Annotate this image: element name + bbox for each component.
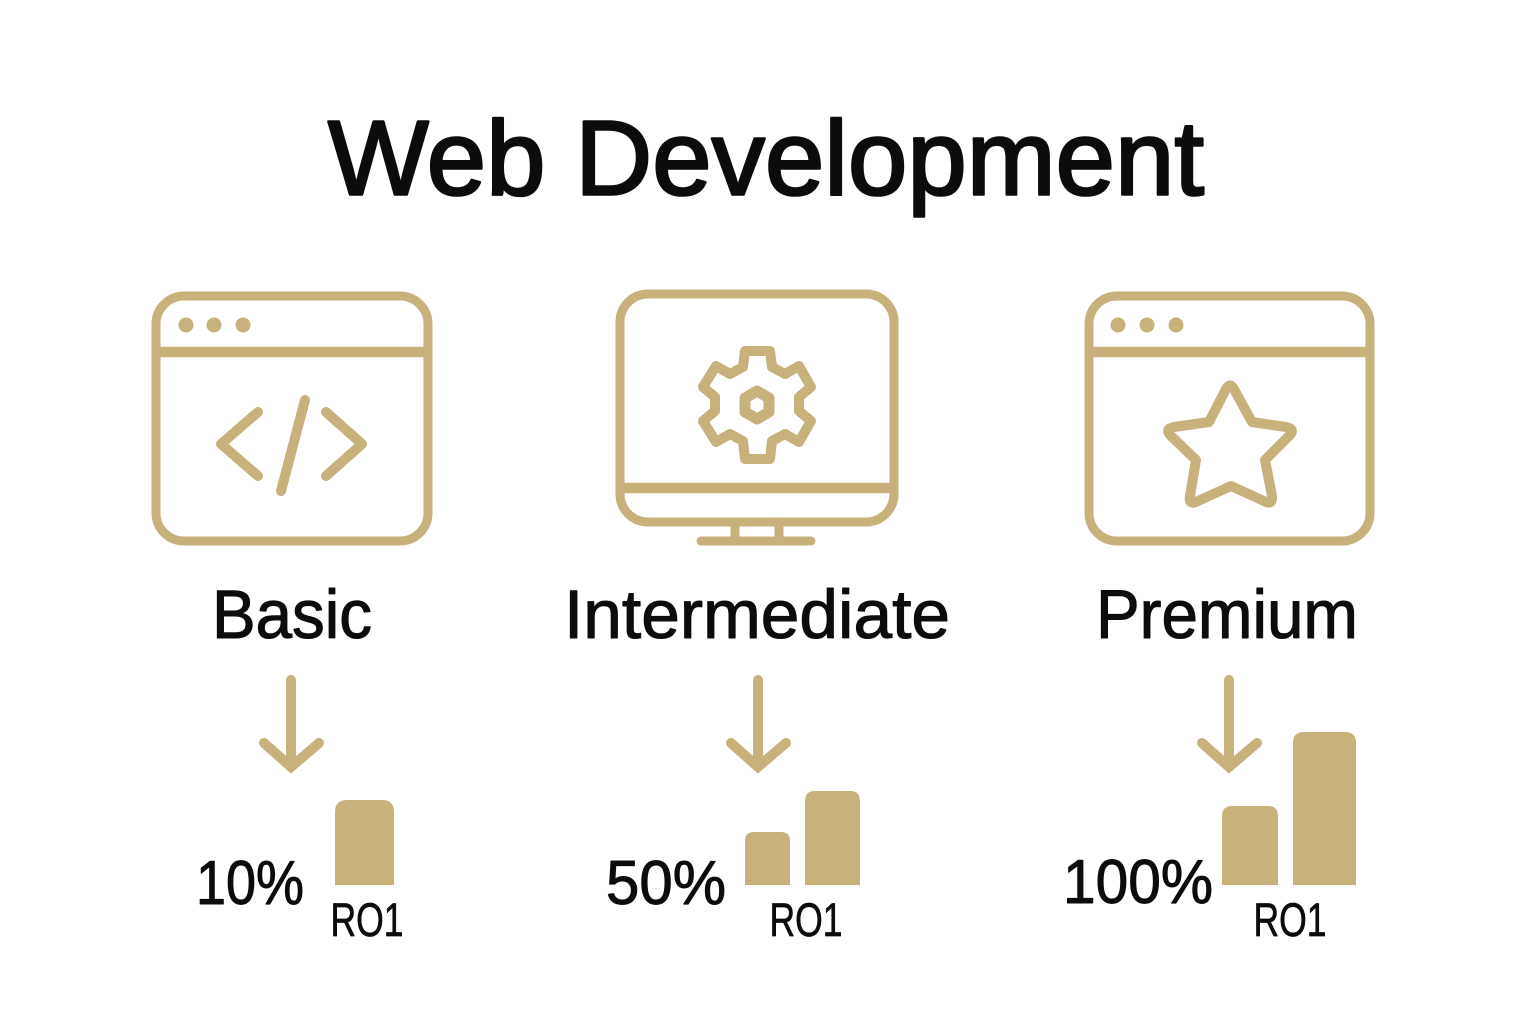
arrow: Intermediate <box>731 680 786 767</box>
bar chart: Premium ROI <box>1222 732 1356 946</box>
arrow: Basic <box>264 680 319 767</box>
bar chart: Premium ROI: RO1 <box>1254 893 1326 946</box>
bar chart: Basic ROI: RO1 <box>330 893 404 946</box>
value: 100%: 100% <box>1063 848 1213 917</box>
title: Web Development <box>328 100 1204 218</box>
icon: code browser window <box>156 296 428 541</box>
icon: monitor with gear <box>620 294 894 541</box>
heading: Premium: Premium <box>1096 576 1358 653</box>
heading: Basic: Basic <box>212 576 372 653</box>
heading: Intermediate: Intermediate <box>564 576 950 653</box>
bar chart: Intermediate ROI: RO1 <box>770 893 842 946</box>
arrow: Premium <box>1202 680 1257 767</box>
icon: star browser window <box>1089 296 1370 541</box>
bar chart: Intermediate ROI <box>745 791 860 946</box>
bar chart: Basic ROI <box>330 800 404 946</box>
value: 10%: 10% <box>196 849 304 918</box>
value: 50%: 50% <box>606 849 726 918</box>
